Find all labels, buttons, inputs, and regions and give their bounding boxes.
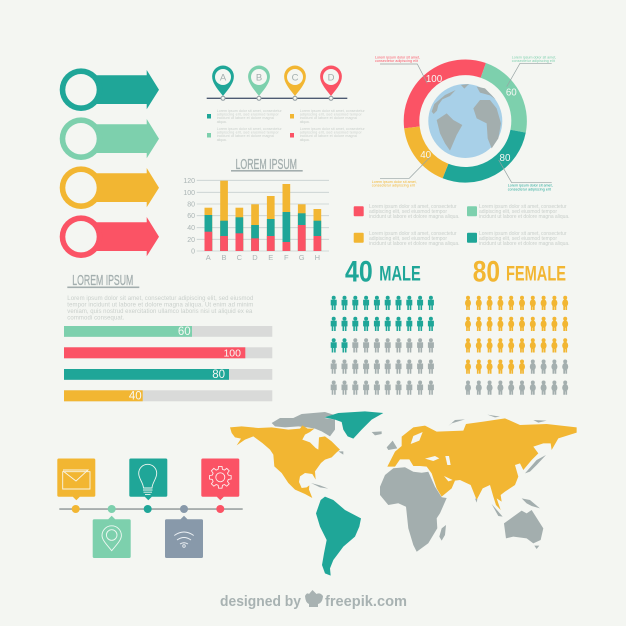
donut callouts: Lorem ipsum dolor sit amet, xyxy=(508,184,553,188)
south america xyxy=(316,497,361,576)
footer: credit: designed by xyxy=(220,594,301,610)
progress bars xyxy=(64,326,272,403)
progress bars paragraph: commodi consequat. xyxy=(67,315,125,321)
pin legend: incidunt ut labore et dolore magna xyxy=(300,116,357,120)
donut values: 40 xyxy=(420,150,432,161)
pin legend: aliqua. xyxy=(217,138,227,142)
progress bars: 60 xyxy=(178,326,191,338)
pin legend: aliqua. xyxy=(300,120,310,124)
stacked bar chart: 0 xyxy=(191,248,195,256)
stacked bar chart: B xyxy=(221,253,227,262)
greenland xyxy=(324,411,383,439)
stacked bar chart: 80 xyxy=(187,202,195,208)
donut values xyxy=(420,74,517,164)
eurasia xyxy=(387,418,577,510)
progress bars paragraph: veniam, quis nostrud exercitation ullamco laboris nisi ut aliquid ex ea xyxy=(67,309,253,315)
progress bars: 80 xyxy=(212,369,225,381)
progress bars paragraph: Lorem ipsum dolor sit amet, consectetur adipiscing elit, sed eiusmod xyxy=(67,296,253,302)
pin legend: Lorem ipsum dolor sit amet, consectetur xyxy=(217,109,282,113)
pin B xyxy=(248,66,270,100)
world map xyxy=(230,411,577,576)
pin legend: adipiscing elit, sed eiusmod tempor xyxy=(300,131,362,135)
pin legend: adipiscing elit, sed eiusmod tempor xyxy=(217,131,279,135)
stacked bar chart: C xyxy=(237,253,243,262)
panel: arrow banners xyxy=(60,68,159,258)
donut legend: adipiscing elit, sed eiusmod tempor xyxy=(369,209,447,215)
donut callouts: Lorem ipsum dolor sit amet, xyxy=(375,55,420,59)
heading: progress bars title xyxy=(67,272,139,289)
stacked bar chart: 40 xyxy=(187,225,195,232)
pin D: D xyxy=(328,72,335,84)
donut legend: Lorem ipsum dolor sit amet, consectetur xyxy=(369,204,457,210)
pictogram: female xyxy=(465,296,568,395)
stacked bar chart xyxy=(183,178,329,262)
heading: progress bars title: LOREM IPSUM xyxy=(72,272,133,289)
africa xyxy=(380,467,447,552)
stacked bar chart: G xyxy=(299,253,305,262)
stacked bar chart: F xyxy=(284,253,289,262)
heading: 80 female: 80 xyxy=(473,256,500,289)
heading: 40 male: 40 xyxy=(345,256,373,289)
donut chart with globe xyxy=(372,55,556,191)
pin legend: incidunt ut labore et dolore magna xyxy=(300,134,357,138)
donut callouts: Lorem ipsum dolor sit amet, xyxy=(372,180,417,184)
stacked bar chart: 100 xyxy=(183,190,195,197)
icon: freepik logo xyxy=(305,590,323,607)
pin legend: incidunt ut labore et dolore magna xyxy=(217,134,274,138)
arrow banner teal xyxy=(60,68,159,111)
heading: 40 male xyxy=(345,256,421,289)
donut legend: incidunt ut labore et dolore magna aliqua. xyxy=(479,214,570,220)
donut callouts xyxy=(372,55,556,191)
stacked bar chart: H xyxy=(315,253,320,262)
progress bars paragraph: tempor incidunt ut labore et dolore magna aliqua. Ut enim ad minim xyxy=(67,302,253,308)
stacked bar chart: 20 xyxy=(187,237,195,244)
donut legend: adipiscing elit, sed eiusmod tempor xyxy=(479,236,557,242)
donut values: 100 xyxy=(426,74,443,85)
donut legend: incidunt ut labore et dolore magna aliqua. xyxy=(369,241,460,247)
pin A xyxy=(212,66,234,100)
heading: 80 female: FEMALE xyxy=(506,262,566,286)
pin legend: aliqua. xyxy=(217,120,227,124)
donut callouts: Lorem ipsum dolor sit amet, xyxy=(512,55,556,59)
pin C xyxy=(284,66,306,100)
pin D xyxy=(320,66,342,100)
donut legend: Lorem ipsum dolor sit amet, consectetur xyxy=(479,231,567,237)
heading: 80 female xyxy=(473,256,566,289)
panel: map pin timeline xyxy=(207,66,347,100)
pin legend: Lorem ipsum dolor sit amet, consectetur xyxy=(217,127,282,131)
europe and asia islands xyxy=(387,415,547,503)
donut legend: incidunt ut labore et dolore magna aliqua. xyxy=(479,241,570,247)
inland seas xyxy=(411,432,453,481)
donut legend: adipiscing elit, sed eiusmod tempor xyxy=(479,209,557,215)
pin legend: Lorem ipsum dolor sit amet, consectetur xyxy=(300,127,365,131)
pin legend: adipiscing elit, sed eiusmod tempor xyxy=(217,113,279,117)
donut callouts: consectetur adipiscing elit xyxy=(375,59,418,63)
pictogram: male xyxy=(331,296,434,395)
donut values: 60 xyxy=(506,88,517,98)
icon: gear xyxy=(201,458,239,513)
footer: credit xyxy=(220,590,407,610)
heading: bar chart title: LOREM IPSUM xyxy=(236,156,297,173)
progress bars: 100 xyxy=(223,348,241,360)
north america xyxy=(230,425,340,498)
stacked bar chart: 60 xyxy=(187,213,195,220)
donut legend: Lorem ipsum dolor sit amet, consectetur xyxy=(369,231,457,237)
donut legend: incidunt ut labore et dolore magna aliqua. xyxy=(369,214,460,220)
pin A: A xyxy=(220,72,227,84)
globe xyxy=(428,84,502,158)
icon: wifi xyxy=(165,505,203,558)
pin legend: aliqua. xyxy=(300,138,310,142)
stacked bar chart: D xyxy=(252,253,258,262)
donut legend: adipiscing elit, sed eiusmod tempor xyxy=(369,236,447,242)
stacked bar chart: A xyxy=(206,253,211,262)
pin legend xyxy=(207,109,365,142)
pin legend: incidunt ut labore et dolore magna xyxy=(217,116,274,120)
arctic canada xyxy=(272,412,335,436)
pin legend: Lorem ipsum dolor sit amet, consectetur xyxy=(300,109,365,113)
icon: location pin xyxy=(93,505,131,558)
donut callouts: consectetur adipiscing elit xyxy=(508,187,551,191)
donut callouts: consectetur adipiscing elit xyxy=(372,184,415,188)
north america group xyxy=(230,411,383,498)
stacked bar chart: E xyxy=(268,253,273,262)
pin C: C xyxy=(292,72,299,84)
icon: envelope xyxy=(57,458,95,513)
donut callouts: consectetur adipiscing elit xyxy=(512,59,555,63)
pin B: B xyxy=(256,72,262,84)
donut segments xyxy=(412,67,519,175)
oceania and madagascar xyxy=(439,498,543,549)
heading: bar chart title xyxy=(231,156,303,173)
arrow banner red xyxy=(60,215,159,258)
progress bars: 40 xyxy=(129,391,142,403)
progress bars paragraph xyxy=(67,296,253,321)
arrow banner yellow xyxy=(60,166,159,209)
pin legend: adipiscing elit, sed eiusmod tempor xyxy=(300,113,362,117)
north atlantic and caribbean islands xyxy=(311,431,382,489)
donut legend: Lorem ipsum dolor sit amet, consectetur xyxy=(479,204,567,210)
icon timeline xyxy=(57,458,243,558)
stacked bar chart: 120 xyxy=(183,178,195,185)
icon: light bulb xyxy=(129,458,167,513)
heading: 40 male: MALE xyxy=(379,262,421,286)
donut values: 80 xyxy=(500,153,511,164)
eurasia group xyxy=(387,415,577,510)
footer: credit: freepik.com xyxy=(325,594,407,610)
donut legend xyxy=(354,204,570,247)
arrow banner mint xyxy=(60,117,159,160)
